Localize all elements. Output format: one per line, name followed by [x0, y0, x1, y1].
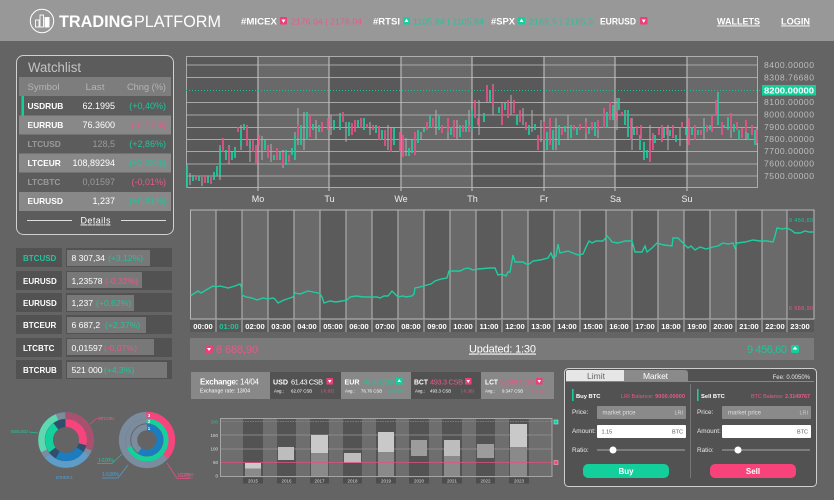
watchlist rows: (+0,81%) — [129, 196, 166, 206]
rate: EUR: Avg.: — [345, 388, 355, 394]
hour labels: 04:00 — [297, 322, 317, 331]
rate: EUR — [344, 378, 405, 394]
price axis: 7700.00000 — [764, 146, 814, 156]
hour labels: 07:00 — [375, 322, 395, 331]
y axis labels — [210, 420, 218, 478]
candles: green — [187, 90, 755, 188]
form: buy: Ratio: — [572, 447, 589, 454]
hour labels: 15:00 — [583, 322, 603, 331]
line chart max and min labels: 6 688,90 — [789, 306, 813, 312]
panel: pair list: 521 000 — [72, 365, 103, 375]
form: sell — [697, 389, 811, 478]
donut labels: right: 1-0,00% — [98, 458, 115, 464]
bar chart markers — [185, 420, 558, 478]
hour labels: 23:00 — [790, 322, 810, 331]
ring numbers — [148, 413, 151, 431]
status bar — [190, 338, 814, 360]
donut labels: right: 1-0,00% — [177, 473, 191, 479]
form: buy: 1.15 — [602, 430, 612, 436]
panel: watchlist — [16, 56, 174, 234]
panel: pair list: BTCEUR — [23, 321, 57, 330]
donut labels: left: ETHER 1 — [56, 475, 73, 481]
weekday labels: Th — [467, 194, 478, 204]
tabs: Fee: 0.0050% — [773, 375, 811, 381]
hour labels: 20:00 — [713, 322, 733, 331]
form: sell: market price — [728, 410, 762, 416]
rate: EUR: (+0.00) — [390, 388, 405, 394]
watchlist rows: 128,5 — [92, 139, 115, 149]
icon: logo — [30, 9, 54, 33]
form: buy: BTC — [672, 430, 683, 436]
price axis: 8400.00000 — [764, 60, 814, 70]
watchlist rows: 0,01597 — [82, 177, 115, 187]
rate: USD: USD — [273, 378, 289, 386]
price axis: 8308.76680 — [764, 72, 814, 82]
ticker: 1105.84 | 1105.84 — [413, 16, 484, 26]
panel: pair list: LTCBTC — [23, 344, 55, 353]
donut labels: left: BITCOIN — [98, 416, 115, 422]
line chart — [190, 210, 814, 332]
tabs: Limit — [587, 371, 606, 381]
hour labels: 08:00 — [401, 322, 421, 331]
panel: pair list: EURUSD — [23, 277, 57, 286]
panel: pair list: (+4,3%) — [104, 365, 134, 375]
rate: USD: Avg.: — [274, 388, 284, 394]
exchange date: Exchange: 14/04 — [200, 378, 260, 386]
hour labels: 21:00 — [739, 322, 759, 331]
line chart max and min labels — [789, 218, 813, 312]
rate: USD — [273, 378, 334, 394]
rate: BCT: Avg.: — [415, 388, 425, 394]
hour labels: 00:00 — [193, 322, 213, 331]
year labels: 2021 — [447, 478, 458, 484]
form: sell: BTC — [797, 430, 808, 436]
form: buy: LRI Balance: 9000.00000 — [621, 394, 685, 400]
ticker: 2176.04 | 2176.04 — [291, 16, 362, 26]
price axis: 8200.00000 — [764, 86, 814, 96]
year labels: 2017 — [314, 478, 325, 484]
weekday labels — [252, 194, 693, 204]
donut labels: right — [97, 454, 191, 479]
weekday labels: Mo — [252, 194, 264, 204]
form: buy: LRI — [674, 410, 683, 416]
form: buy: market price — [602, 410, 636, 416]
year labels: 2023 — [514, 478, 525, 484]
rate: EUR: 76.76 CSB — [361, 388, 382, 394]
donut labels: left: 500USD — [11, 429, 29, 435]
watchlist rows: LTCUSD — [28, 139, 61, 149]
form: buy — [572, 389, 686, 478]
logo wordmark: TRADING — [59, 12, 133, 31]
status bar: 9 456,60 — [747, 344, 787, 356]
form: sell: Price: — [697, 409, 714, 416]
donut chart: left — [11, 416, 115, 481]
watchlist rows: 108,89294 — [72, 158, 115, 168]
tabs — [566, 370, 814, 382]
candlestick chart — [186, 56, 816, 204]
year labels: 2018 — [347, 478, 358, 484]
tabs: Market — [643, 371, 669, 381]
hour labels: 06:00 — [349, 322, 369, 331]
bars — [245, 424, 527, 476]
form: buy: Buy BTC — [576, 394, 601, 400]
rate: USD: 61.43 CSB — [291, 378, 323, 386]
price axis: 7800.00000 — [764, 134, 814, 144]
watchlist rows: EURRUB — [28, 120, 63, 130]
watchlist rows: 62.1995 — [82, 101, 115, 111]
weekday labels: Sa — [610, 194, 621, 204]
form: sell: LRI — [799, 410, 808, 416]
panel: pair list: 1,237 — [72, 298, 93, 308]
ticker — [241, 16, 648, 26]
price line — [191, 228, 813, 303]
hour labels: 10:00 — [453, 322, 473, 331]
form: sell: Sell — [746, 467, 760, 476]
price axis: 8100.00000 — [764, 97, 814, 107]
panel: pair list: BTCRUB — [23, 366, 57, 375]
bar chart — [185, 418, 558, 484]
donut labels: left — [11, 416, 115, 481]
watchlist title: Watchlist — [28, 60, 81, 75]
navigation links — [717, 16, 810, 26]
watchlist rows: (+0,40%) — [129, 101, 166, 111]
year labels: 2019 — [381, 478, 392, 484]
navigation links: WALLETS — [717, 16, 760, 26]
ticker: EURUSD — [600, 16, 636, 26]
y axis labels: 100 — [210, 446, 218, 452]
hour labels: 05:00 — [323, 322, 343, 331]
panel: pair list: 8 307,34 — [72, 253, 105, 263]
rate: EUR: 76.76 CSB — [362, 378, 394, 386]
rate: EUR: EUR — [344, 378, 360, 386]
candles: wicks — [190, 84, 757, 186]
watchlist rows: Symbol — [28, 82, 60, 93]
ticker: #SPX — [491, 16, 515, 26]
watchlist rows: LTCBTC — [28, 177, 60, 187]
panel: pair list: (+2,37%) — [105, 320, 140, 330]
candles: pink — [196, 85, 757, 184]
form: buy: Buy — [618, 467, 634, 476]
form: buy: Amount: — [572, 428, 596, 435]
hour labels: 22:00 — [765, 322, 785, 331]
details link — [27, 216, 166, 226]
rate: BCT: BCT — [414, 378, 428, 386]
panel: pair list: (-0,07%) — [104, 343, 137, 353]
exchange rates strip — [191, 372, 554, 399]
panel: pair list: (+0,62%) — [96, 298, 131, 308]
hour labels: 17:00 — [635, 322, 655, 331]
y axis labels: 150 — [210, 433, 218, 438]
weekday labels: We — [394, 194, 408, 204]
rate: BCT — [414, 378, 474, 394]
rate: USD: (-0.63) — [321, 388, 334, 394]
logo wordmark: PLATFORM — [134, 12, 221, 31]
year labels: 2015 — [248, 478, 259, 484]
panel: pair list: 1,23578 — [72, 276, 103, 286]
weekday labels: Fr — [540, 194, 548, 204]
watchlist rows: EURUSD — [28, 196, 63, 206]
rate: LCT — [485, 378, 545, 394]
hour labels: 12:00 — [505, 322, 525, 331]
form: sell: Amount: — [697, 428, 721, 435]
status bar: Updated: 1:30 — [469, 344, 536, 356]
price axis: 8000.00000 — [764, 110, 814, 120]
watchlist rows — [19, 77, 171, 211]
details link: Details — [80, 216, 111, 226]
year labels: 2016 — [281, 478, 292, 484]
y axis labels: 200 — [210, 420, 218, 424]
panel: pair list: (+3,12%) — [108, 253, 143, 263]
hour labels: 18:00 — [661, 322, 681, 331]
watchlist rows: 1,237 — [92, 196, 115, 206]
rate: BCT: 493.3 CSB — [430, 378, 463, 386]
rate: BCT: (-0.38) — [461, 388, 474, 394]
watchlist rows: (+2,08%) — [129, 158, 166, 168]
hour labels: 02:00 — [245, 322, 265, 331]
hour labels: 19:00 — [687, 322, 707, 331]
hour labels: 11:00 — [479, 322, 499, 331]
watchlist rows: (-0,01%) — [131, 177, 166, 187]
ticker: #MICEX — [241, 16, 277, 26]
ticker: #RTSI — [373, 16, 400, 26]
price axis: 7900.00000 — [764, 122, 814, 132]
watchlist rows: LTCEUR — [28, 158, 61, 168]
panel: pair list — [16, 248, 172, 379]
rate: LCT: 9.240 CSB — [500, 378, 534, 386]
ticker: 2165.5 | 2165.5 — [529, 16, 593, 26]
rate: LCT: (-0.11) — [532, 388, 545, 394]
watchlist rows: Chng (%) — [127, 82, 166, 93]
hour labels: 16:00 — [609, 322, 629, 331]
header bar — [0, 0, 834, 41]
panel: pair list: (-0,32%) — [105, 276, 138, 286]
hour labels: 14:00 — [557, 322, 577, 331]
weekday labels: Tu — [324, 194, 335, 204]
watchlist rows: USDRUB — [28, 101, 63, 111]
price axis: 7600.00000 — [764, 158, 814, 168]
watchlist rows: 76.3600 — [82, 120, 115, 130]
panel: pair list: 6 687,2 — [72, 320, 100, 330]
status bar: 6 688,90 — [216, 344, 258, 356]
rate: LCT: LCT — [485, 378, 498, 386]
rate: LCT: 9.347 CSB — [502, 388, 523, 394]
bar chart markers: 750 — [186, 472, 194, 477]
hour labels: 13:00 — [531, 322, 551, 331]
rate: BCT: 493.3 CSB — [430, 388, 451, 394]
price axis: 7500.00000 — [764, 171, 814, 181]
y axis labels: 0 — [215, 474, 218, 478]
ring numbers: 2 — [148, 419, 151, 424]
panel: trade form — [564, 368, 816, 486]
hour labels: 09:00 — [427, 322, 447, 331]
exchange date — [200, 378, 260, 394]
logo wordmark — [59, 12, 221, 31]
rate: LCT: Avg.: — [485, 388, 495, 394]
year labels — [243, 478, 529, 484]
exchange date: Exchange rate: 13/04 — [200, 388, 250, 394]
rate: USD: 62.07 CSB — [291, 388, 312, 394]
price axis — [762, 60, 816, 181]
donut labels: right: 1-0,00% — [102, 472, 120, 478]
watchlist rows: Last — [86, 82, 105, 93]
year labels: 2020 — [414, 478, 425, 484]
hour labels: 01:00 — [219, 322, 239, 331]
form: sell: Ratio: — [697, 447, 714, 454]
donut chart: right — [97, 413, 191, 479]
hour labels: 03:00 — [271, 322, 291, 331]
panel: pair list: 0,01597 — [72, 343, 103, 353]
panel: pair list: EURUSD — [23, 299, 57, 308]
form: buy: Price: — [572, 409, 589, 416]
ring numbers: 1 — [148, 426, 151, 431]
line chart max and min labels: 9 456,60 — [789, 218, 813, 224]
hour labels — [190, 320, 814, 332]
form: sell: BTC Balance: 2.3149767 — [751, 394, 810, 400]
watchlist rows: (-0,17%) — [131, 120, 166, 130]
watchlist rows: (+2,86%) — [129, 139, 166, 149]
ring numbers: 3 — [148, 413, 151, 418]
navigation links: LOGIN — [781, 16, 810, 26]
year labels: 2022 — [480, 478, 491, 484]
y axis labels: 50 — [213, 460, 218, 465]
weekday labels: Su — [681, 194, 693, 204]
form: sell: Sell BTC — [701, 394, 726, 400]
panel: pair list: BTCUSD — [23, 254, 57, 263]
